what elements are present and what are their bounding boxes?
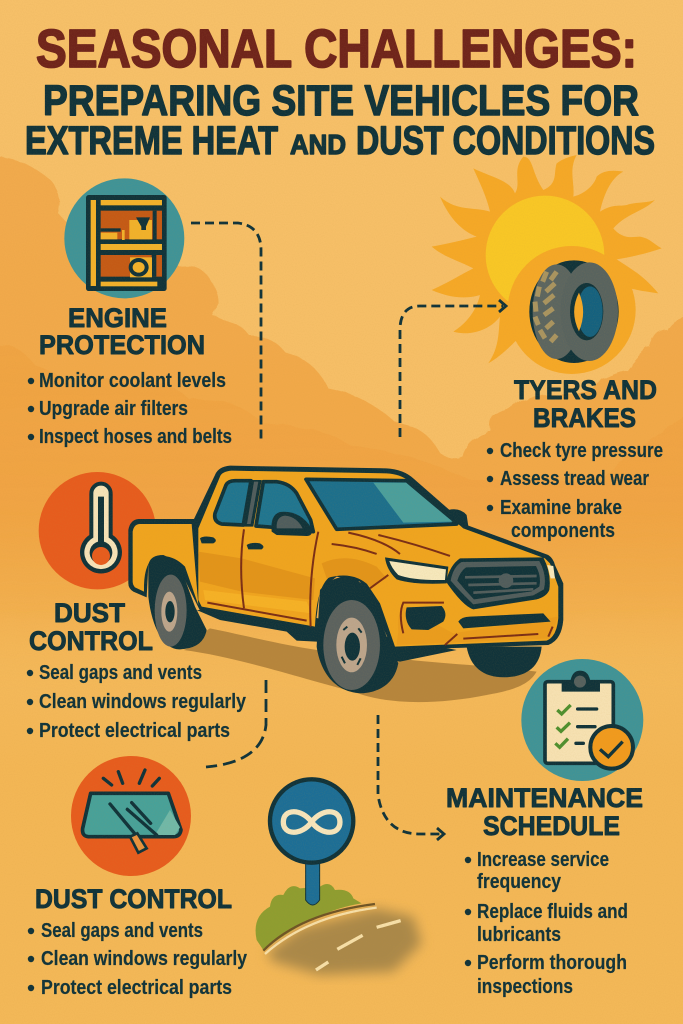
connector arrow: truck to tyres <box>400 300 506 437</box>
bullet list: maintenance schedule: Increase service <box>477 849 609 871</box>
bullet list: maintenance schedule: frequency <box>477 871 562 893</box>
far front wheel <box>467 647 542 677</box>
bullet list: dust control <box>27 662 247 742</box>
heading: engine protection: ENGINE <box>68 303 167 333</box>
truck chassis shadow <box>197 610 457 662</box>
bullet list: engine protection: Monitor coolant levels <box>39 370 226 392</box>
bullet list: tyres and brakes: Examine brake <box>500 497 622 519</box>
sign post <box>306 862 320 905</box>
sign face with infinity symbol <box>270 779 353 863</box>
icon: clipboard checklist <box>521 659 643 781</box>
bullet list: maintenance schedule: inspections <box>477 976 573 998</box>
panel: engine protection <box>28 178 232 448</box>
title line: extreme heat and dust conditions: EXTREME HEAT <box>25 119 278 163</box>
door handles <box>200 537 263 549</box>
panel: tyres and brakes <box>487 375 663 542</box>
front door window <box>256 482 313 532</box>
door pillar <box>243 480 262 527</box>
grille <box>446 557 555 609</box>
bullet list: maintenance schedule: lubricants <box>477 924 561 946</box>
far mirror <box>448 509 468 526</box>
heading: dust control: DUST <box>54 598 125 628</box>
bullet list: dust control: Clean windows regularly <box>41 948 248 970</box>
door and hood crease lines <box>207 529 553 645</box>
truck illustration <box>128 466 563 702</box>
bullet list: dust control: Clean windows regularly <box>39 691 247 713</box>
front wheel <box>317 577 398 693</box>
bullet list: dust control <box>28 920 248 999</box>
truck body <box>128 466 563 650</box>
icon: windshield wiper <box>71 756 191 876</box>
panel: dust control (thermometer) <box>27 472 247 742</box>
bullet list: engine protection: Upgrade air filters <box>39 398 188 420</box>
heading: maintenance schedule: MAINTENANCE <box>446 783 643 813</box>
title line: extreme heat and dust conditions <box>25 119 655 163</box>
bullet list: dust control: Seal gaps and vents <box>39 662 202 684</box>
bullet list: engine protection: Inspect hoses and belts <box>39 426 232 448</box>
panel: maintenance schedule <box>446 659 643 998</box>
heading: dust control <box>29 598 153 656</box>
illustration: road sign on dusty road <box>256 779 422 975</box>
bullet list: engine protection <box>28 370 232 448</box>
rear wheel <box>148 555 207 649</box>
heading: tyers and brakes: TYERS AND <box>514 375 657 405</box>
road markings <box>316 921 401 970</box>
heading: dust control: CONTROL <box>29 626 153 656</box>
connector: dust control to wiper panel <box>206 680 266 767</box>
fog lamp <box>406 606 445 630</box>
bullet list: maintenance schedule <box>465 849 628 998</box>
road edge <box>263 904 375 951</box>
lower grille <box>458 613 551 628</box>
icon: engine protection <box>64 178 184 298</box>
bullet list: tyres and brakes: components <box>511 520 615 542</box>
title <box>25 19 655 163</box>
bullet list: maintenance schedule: Replace fluids and <box>477 901 628 923</box>
bullet list: tyres and brakes: Assess tread wear <box>500 468 649 490</box>
panel: dust control (wiper) <box>28 756 248 999</box>
heading: dust control: DUST CONTROL <box>35 884 232 914</box>
bullet list: tyres and brakes <box>487 440 663 542</box>
connector: engine protection to truck <box>191 223 261 443</box>
side mirror <box>271 512 312 536</box>
windshield <box>306 479 457 529</box>
title line: extreme heat and dust conditions: AND <box>290 129 346 160</box>
heading: maintenance schedule: SCHEDULE <box>483 811 620 841</box>
headlight <box>385 557 448 584</box>
icon: sun behind tyre <box>432 155 662 374</box>
heading: engine protection <box>39 303 205 360</box>
truck ground shadow <box>183 628 537 702</box>
connector arrow: truck to maintenance <box>378 715 444 840</box>
heading: maintenance schedule <box>446 783 643 841</box>
bullet list: dust control: Seal gaps and vents <box>41 920 203 942</box>
icon: tyre <box>529 260 619 363</box>
bullet list: maintenance schedule: Perform thorough <box>477 952 627 974</box>
icon: thermometer <box>39 472 156 589</box>
heading: tyers and brakes <box>514 375 657 433</box>
rear door window <box>215 481 251 525</box>
heading: tyers and brakes: BRAKES <box>533 403 636 433</box>
bullet list: dust control: Protect electrical parts <box>41 977 232 999</box>
dusty road <box>267 908 422 975</box>
bullet list: dust control: Protect electrical parts <box>39 720 230 742</box>
body shading <box>198 552 387 600</box>
grass bush <box>256 884 362 950</box>
heading: engine protection: PROTECTION <box>39 330 205 360</box>
